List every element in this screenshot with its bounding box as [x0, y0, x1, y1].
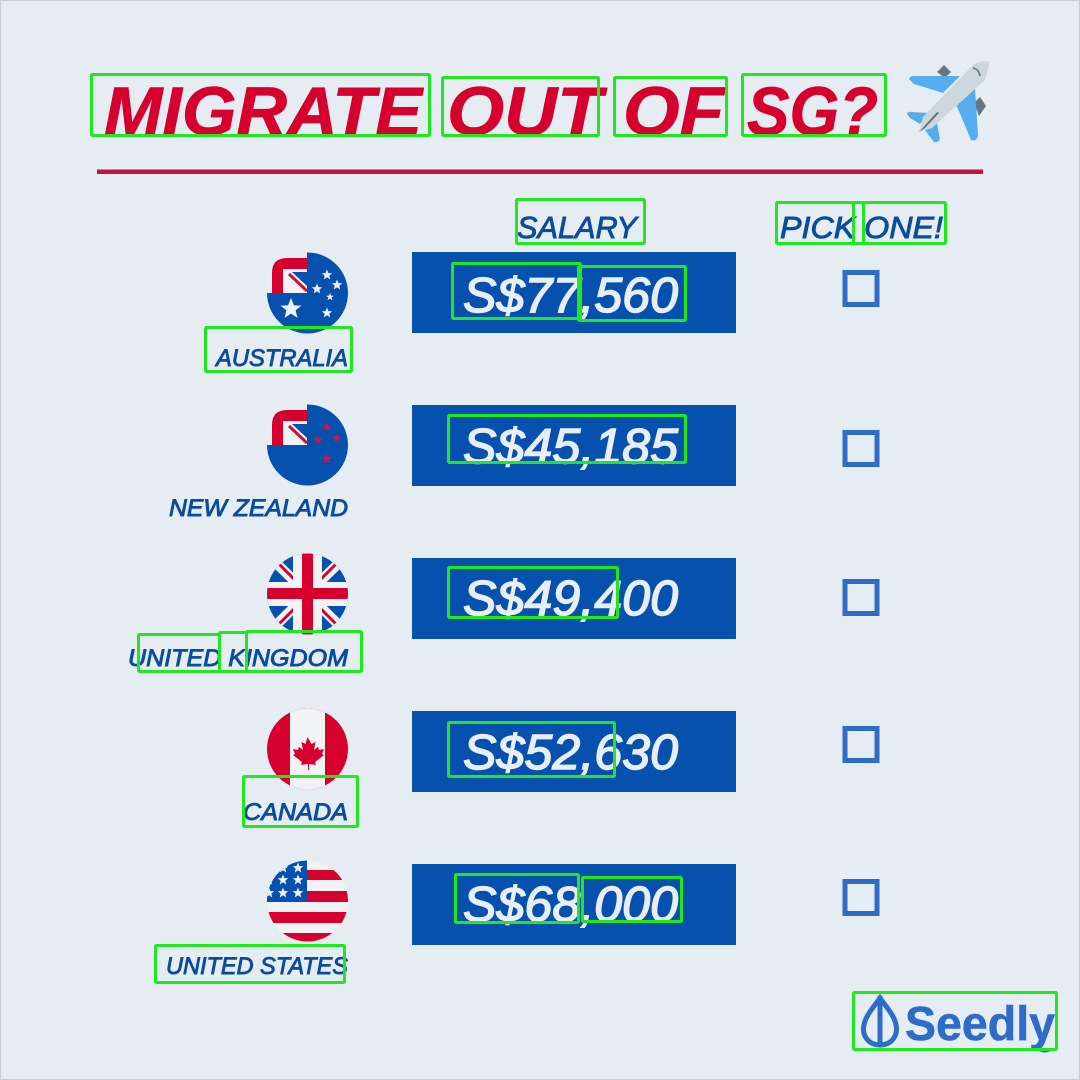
- flag: New Zealand: [265, 402, 348, 486]
- label: United Kingdom: UNITED KINGDOM: [128, 645, 348, 672]
- title: MIGRATE: [104, 73, 424, 150]
- label: Australia: AUSTRALIA: [214, 345, 348, 372]
- column heading: pick one: PICK ONE!: [780, 210, 943, 245]
- checkbox: United Kingdom: [845, 582, 877, 614]
- title: SG?: [747, 73, 878, 150]
- salary value: United States: S$68,000: [463, 878, 678, 932]
- title: OUT: [447, 73, 607, 150]
- flag: Canada: [266, 708, 349, 790]
- salary bar: Canada: [412, 711, 736, 792]
- checkbox: New Zealand: [845, 432, 877, 464]
- salary bar: United Kingdom: [412, 558, 736, 639]
- salary bar: Australia: [412, 252, 736, 333]
- flag: United States: [264, 860, 349, 943]
- salary bar: New Zealand: [412, 405, 736, 486]
- logo: Seedly: Seedly: [905, 998, 1055, 1051]
- salary bar: United States: [412, 864, 736, 945]
- checkbox: Australia: [845, 272, 877, 304]
- icon: airplane: [907, 61, 989, 142]
- salary value: New Zealand: S$45,185: [463, 420, 679, 474]
- title: OF: [623, 73, 726, 150]
- column heading: salary: SALARY: [517, 210, 639, 245]
- title: [104, 73, 878, 150]
- checkbox: Canada: [845, 728, 877, 760]
- label: New Zealand: NEW ZEALAND: [169, 495, 348, 522]
- salary value: United Kingdom: S$49,400: [463, 572, 678, 626]
- title rule: [97, 170, 983, 174]
- salary value: Canada: S$52,630: [463, 726, 678, 780]
- flag: Australia: [265, 250, 348, 334]
- flag: United Kingdom: [266, 553, 349, 635]
- label: Canada: CANADA: [243, 799, 348, 826]
- salary value: Australia: S$77,560: [463, 269, 678, 323]
- checkbox: United States: [845, 882, 877, 914]
- label: United States: UNITED STATES: [166, 953, 348, 980]
